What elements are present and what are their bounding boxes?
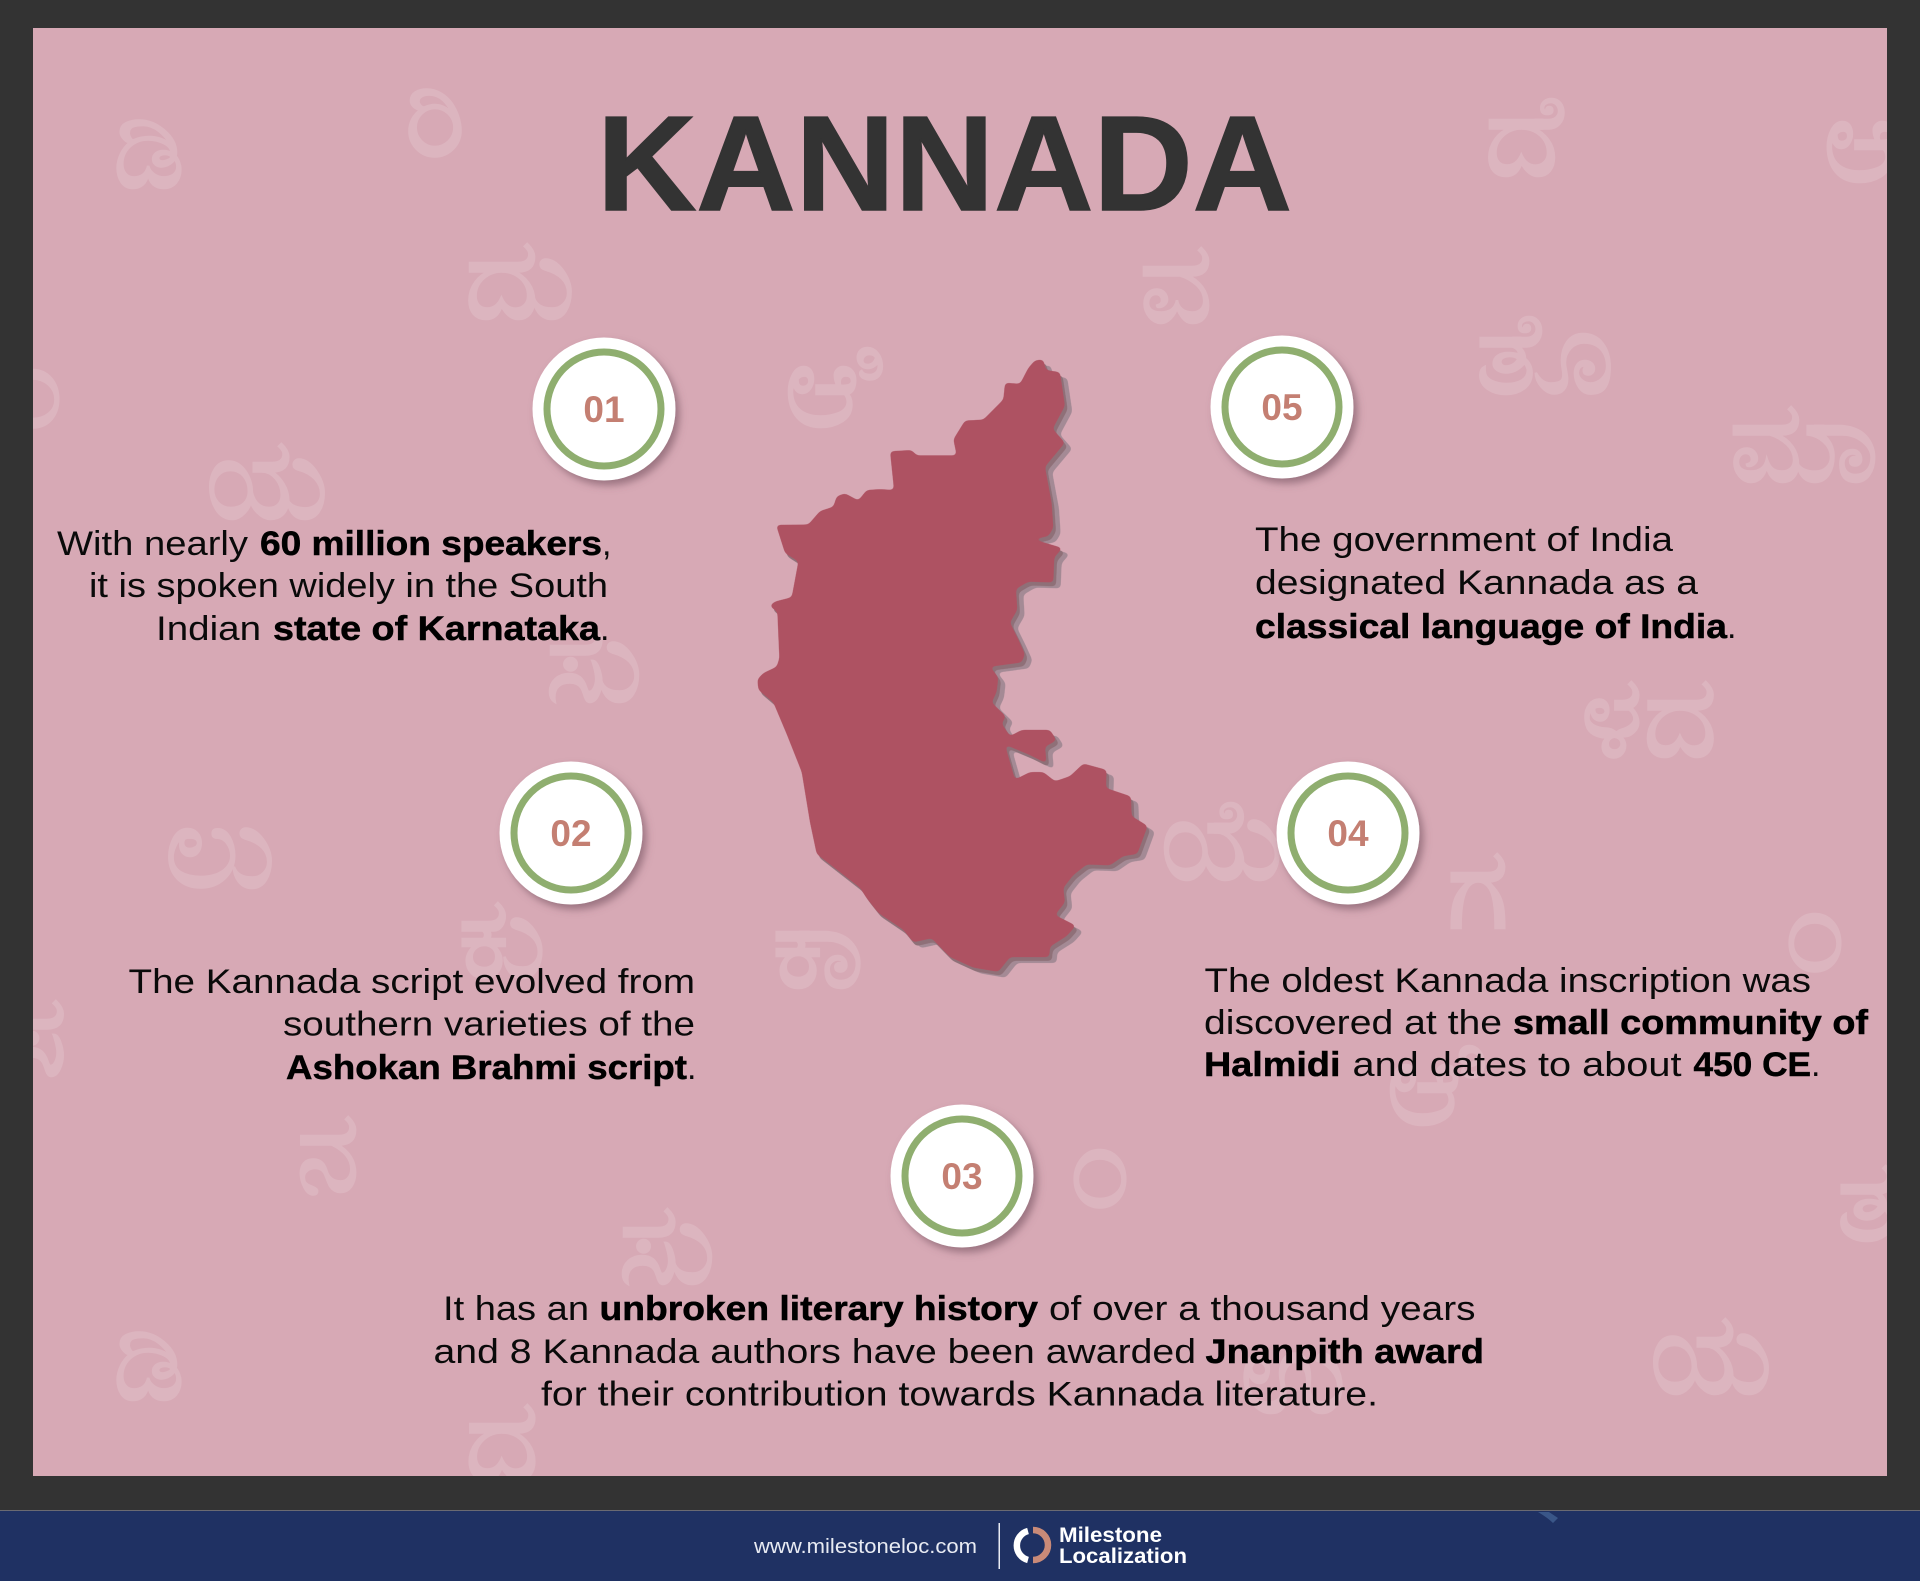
text block 05: classical language of India <box>1255 608 1728 646</box>
text block 03 <box>434 1290 1484 1414</box>
background watermark letters: ದು <box>465 215 575 343</box>
text block 01: . <box>600 610 609 648</box>
background watermark letters: ಕು <box>458 874 546 1002</box>
map of Karnataka <box>757 359 1155 978</box>
background watermark letters: ೦ <box>1068 1104 1132 1232</box>
background watermark letters: ೦ <box>1783 868 1847 996</box>
text block 04: . <box>1811 1046 1820 1084</box>
text block 02 <box>128 963 696 1087</box>
background watermark letters: ಕಾ <box>772 884 864 1012</box>
badge 02: 02 <box>550 813 592 854</box>
footer brand name: Milestone <box>1059 1524 1162 1547</box>
text block 01: 60 million speakers <box>260 525 602 563</box>
badge 01: 01 <box>583 389 625 430</box>
badge 03 <box>890 1104 1034 1248</box>
text block 05: designated Kannada as a <box>1255 564 1698 602</box>
badge 05: 05 <box>1261 387 1303 428</box>
background watermark letters: ಆಿ <box>1386 1021 1484 1149</box>
badge 04: 04 <box>1327 813 1369 854</box>
badge 02 <box>500 762 642 904</box>
text block 02: southern varieties of the <box>283 1006 695 1044</box>
background watermark letters: ಡಿ <box>113 84 185 212</box>
text block 03: of over a thousand years <box>1049 1290 1476 1328</box>
text block 04: The oldest Kannada inscription was <box>1204 962 1811 1000</box>
text block 02: . <box>687 1049 696 1087</box>
icon: milestone logo <box>1017 1530 1048 1560</box>
footer brand name: Localization <box>1059 1545 1187 1568</box>
text block 04: Halmidi <box>1204 1046 1340 1084</box>
text block 01: , <box>602 525 611 563</box>
background watermark letters: ಆಿ <box>784 323 882 451</box>
footer brand name <box>1059 1524 1187 1568</box>
background watermark letters: ತೊ <box>1476 290 1614 418</box>
title: KANNADA <box>597 88 1292 239</box>
background watermark letters: ರಿ <box>405 53 465 181</box>
text block 03: unbroken literary history <box>600 1290 1038 1328</box>
text block 02: Ashokan Brahmi script <box>286 1049 687 1087</box>
background watermark letters: ತ <box>1837 1137 1897 1265</box>
background watermark letters: ಉ <box>1240 1309 1346 1437</box>
background watermark letters: ಲು <box>164 784 276 912</box>
text block 04: and dates to about <box>1352 1046 1682 1084</box>
background watermark letters: ಆ <box>1823 78 1899 206</box>
text block 03: It has an <box>443 1290 589 1328</box>
text block 04: small community of <box>1513 1004 1869 1042</box>
text block 05: . <box>1727 608 1736 646</box>
text block 05: The government of India <box>1255 521 1673 559</box>
badge 01 <box>532 338 676 480</box>
text block 01 <box>57 525 611 648</box>
background watermark letters: ಳದ <box>1581 653 1717 781</box>
background watermark letters: ಯೆ <box>1160 776 1288 904</box>
background watermark letters: ಸ <box>6 972 68 1100</box>
text block 02: The Kannada script evolved from <box>128 963 695 1001</box>
text block 03: and 8 Kannada authors have been awarded <box>434 1333 1196 1371</box>
background watermark letters: ನ <box>296 1088 360 1216</box>
background watermark letters: ಗ <box>1447 825 1509 953</box>
background watermark letters: ಯ <box>1649 1290 1773 1418</box>
footer bar <box>0 1510 1920 1581</box>
background watermark letters: ಮಾ <box>1729 378 1879 506</box>
background watermark letters: ಸು <box>545 598 643 726</box>
background watermark letters: ಯ <box>205 415 329 543</box>
badge 05 <box>1210 336 1354 478</box>
text block 05 <box>1255 521 1736 646</box>
badge 04 <box>1276 762 1420 904</box>
background watermark letters: ೦ <box>1 324 65 452</box>
text block 01: state of Karnataka <box>273 610 601 648</box>
text block 01: With nearly <box>57 525 248 563</box>
background watermark letters: ದ <box>465 1376 539 1504</box>
text block 03: for their contribution towards Kannada literature. <box>541 1376 1378 1414</box>
background watermark letters: ಸು <box>618 1180 716 1308</box>
background watermark letters: ಡಿ <box>113 1296 185 1424</box>
footer divider <box>998 1523 1000 1569</box>
text block 01: Indian <box>156 610 261 648</box>
footer website: www.milestoneloc.com <box>753 1536 977 1558</box>
background watermark letters: ದೆ <box>1485 72 1564 200</box>
text block 04 <box>1204 962 1869 1084</box>
text block 01: it is spoken widely in the South <box>89 567 608 605</box>
badge 03: 03 <box>941 1156 983 1197</box>
background watermark letters: ವ <box>1139 219 1213 347</box>
text block 04: 450 CE <box>1694 1046 1811 1084</box>
text block 04: discovered at the <box>1204 1004 1502 1042</box>
text block 03: Jnanpith award <box>1206 1333 1484 1371</box>
